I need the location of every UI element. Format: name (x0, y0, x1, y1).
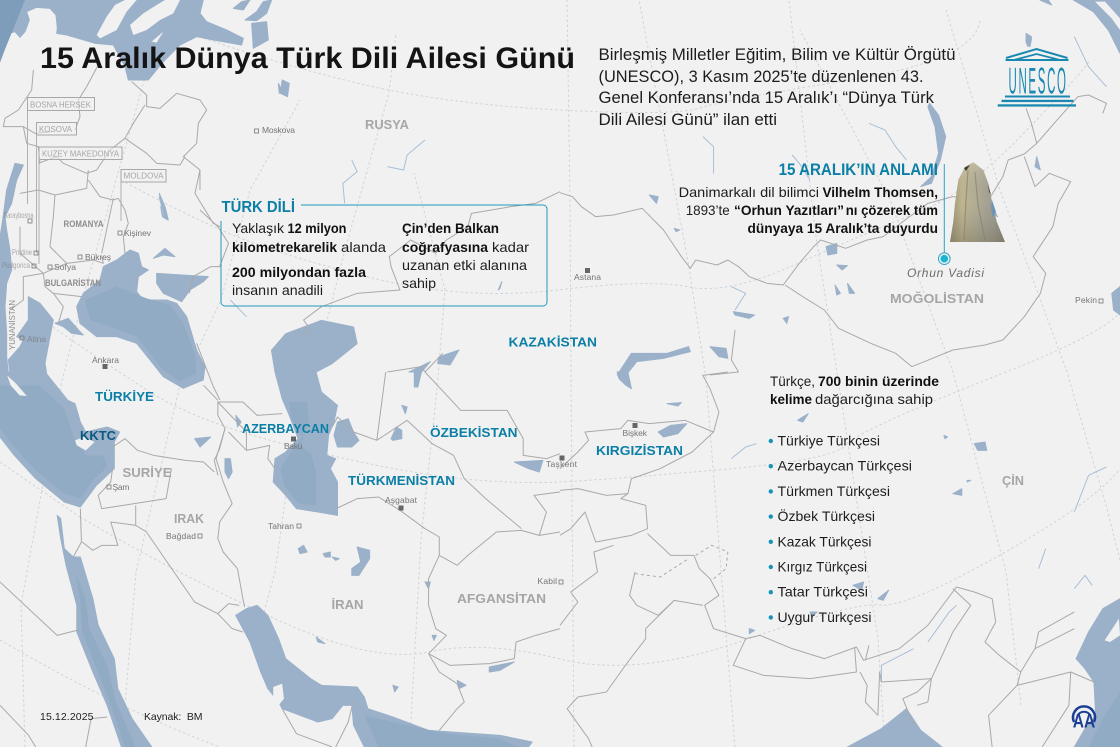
intro paragraph: Genel Konferansı’nda 15 Aralık’ı “Dünya Türk (598, 88, 934, 107)
intro paragraph: Birleşmiş Milletler Eğitim, Bilim ve Kültür Örgütü (598, 45, 956, 64)
Turkic country labels: KKTC (80, 428, 117, 443)
Baltic and north seas (0, 0, 282, 93)
left column text: 200 milyondan fazla (232, 264, 366, 280)
city: Priştine: Priştine (12, 247, 32, 257)
list item: Azerbaycan Türkçesi: Azerbaycan Türkçesi (778, 458, 912, 474)
list intro: 700 binin üzerinde (818, 373, 939, 389)
footer: date and source: 15.12.2025 (40, 711, 94, 723)
right column text: sahip (402, 275, 436, 291)
panel: Türk Dili (221, 197, 547, 306)
list intro: kelime (770, 391, 812, 407)
list item: Türkiye Türkçesi: Türkiye Türkçesi (778, 432, 880, 448)
icon: UNESCO logo: UNESCO (1008, 60, 1066, 102)
tag: Bosna Hersek (28, 98, 94, 204)
city: Moskova: Moskova (262, 125, 295, 135)
left column text: 12 milyon (288, 220, 346, 236)
neutral country labels: IRAK (174, 511, 205, 526)
Turkic country labels: KIRGIZİSTAN (596, 443, 683, 458)
Turkic country labels: TÜRKMENİSTAN (348, 473, 455, 488)
left column text: kilometrekarelik (232, 239, 337, 255)
Mediterranean, Red Sea, Caspian, Gulf (0, 320, 543, 747)
icon: Anadolu Agency logo (1073, 706, 1096, 732)
leader line and marker (938, 164, 950, 264)
list item: Kırgız Türkçesi: Kırgız Türkçesi (778, 558, 867, 574)
neutral country labels: AFGANSİTAN (457, 591, 546, 606)
city: Aşgabat (385, 495, 418, 510)
neutral country labels: ROMANYA (64, 219, 104, 229)
list intro: dağarcığına sahip (815, 391, 933, 407)
explanation text: dünyaya 15 Aralık’ta duyurdu (748, 220, 938, 236)
left column text: insanın anadili (232, 282, 323, 298)
image: Orhun inscription stone (950, 162, 1005, 242)
neutral country labels: SURİYE (122, 465, 172, 480)
tag: Moldova: MOLDOVA (124, 170, 164, 180)
list intro (770, 373, 939, 407)
explanation text: 1893’te (686, 202, 730, 218)
Adriatic, Aegean, Black Sea (zoomed trace) (0, 163, 208, 388)
city: Bağdad: Bağdad (166, 531, 196, 541)
list item: Uygur Türkçesi: Uygur Türkçesi (778, 609, 872, 625)
city: Pekin: Pekin (1075, 295, 1097, 305)
Sea of Okhotsk corner (1026, 0, 1120, 53)
Turkic country labels: KAZAKİSTAN (508, 334, 597, 350)
city: Podgorica: Podgorica (2, 260, 30, 270)
explanation text: nı çözerek tüm (846, 202, 938, 218)
list item: Kazak Türkçesi: Kazak Türkçesi (778, 533, 872, 549)
city: Atina: Atina (27, 334, 46, 344)
city: Kişinev: Kişinev (124, 228, 152, 238)
list item: Türkmen Türkçesi: Türkmen Türkçesi (778, 483, 890, 499)
city: Bakü (284, 436, 303, 451)
list item: Tatar Türkçesi: Tatar Türkçesi (778, 584, 868, 600)
panel: Turkic languages list (769, 373, 939, 625)
panel frame (221, 205, 547, 306)
city: Ankara: Ankara (92, 355, 119, 365)
explanation text: Danimarkalı dil bilimci (679, 184, 819, 200)
Turkic country labels: TÜRKİYE (95, 389, 154, 404)
city: Taşkent: Taşkent (546, 459, 578, 469)
left column text: alanda (341, 239, 386, 255)
map: rivers (159, 37, 1106, 682)
neutral country labels: RUSYA (365, 117, 410, 132)
footer: date and source (40, 711, 202, 723)
right column text (402, 220, 529, 291)
intro paragraph (598, 45, 956, 129)
list item: Özbek Türkçesi: Özbek Türkçesi (778, 507, 875, 524)
neutral country labels: MOĞOLİSTAN (890, 291, 984, 306)
tag: Kosova (36, 122, 76, 253)
footer: date and source: Kaynak: BM (144, 711, 202, 723)
neutral country labels: BULGARİSTAN (45, 278, 101, 288)
callout lines: Balkan country tags (28, 98, 166, 264)
right column text: uzanan etki alanına (402, 257, 527, 273)
city: Bişkek: Bişkek (622, 428, 648, 438)
left column text: Yaklaşık (232, 220, 285, 236)
neutral country labels: ÇİN (1002, 473, 1024, 488)
right column text: Çin’den Balkan (402, 220, 499, 236)
tag: Kuzey Makedonya (39, 147, 122, 264)
explanation text (679, 184, 938, 236)
intro paragraph: Dili Ailesi Günü” ilan etti (598, 110, 777, 129)
city: Aşgabat: Aşgabat (385, 495, 418, 505)
left column text (232, 220, 386, 298)
tag: Moldova (121, 170, 166, 221)
tag: Kuzey Makedonya: KUZEY MAKEDONYA (42, 148, 119, 158)
Turkic country labels (80, 334, 683, 488)
city: Bişkek (622, 423, 648, 438)
city: Astana: Astana (574, 272, 601, 282)
neutral country labels (7, 117, 1024, 612)
city: Saraybosna: Saraybosna (4, 210, 34, 220)
explanation text: Vilhelm Thomsen, (822, 184, 938, 200)
explanation text: “Orhun Yazıtları” (734, 202, 844, 218)
city: Kabil: Kabil (538, 576, 557, 586)
lakes in Central Asia and Siberia (617, 33, 1120, 375)
city: Sofya: Sofya (54, 262, 76, 272)
Turkic country labels: ÖZBEKİSTAN (430, 425, 518, 440)
right column text: coğrafyasına (402, 239, 488, 255)
neutral country labels: YUNANİSTAN (7, 300, 17, 350)
right column text: kadar (492, 239, 529, 255)
list intro: Türkçe, (770, 373, 815, 389)
tag: Bosna Hersek: BOSNA HERSEK (30, 100, 91, 110)
city: Bükreş: Bükreş (85, 252, 111, 262)
neutral country labels: İRAN (332, 597, 364, 612)
icon: UNESCO logo (998, 49, 1076, 107)
location label: Orhun Vadisi (907, 266, 984, 280)
city: Şam: Şam (112, 482, 130, 492)
Turkic country labels: AZERBAYCAN (242, 421, 329, 436)
city: Bakü: Bakü (284, 441, 303, 451)
tag: Kosova: KOSOVA (39, 124, 72, 134)
panel heading: TÜRK DİLİ (222, 197, 295, 216)
icon: Anadolu Agency logo: AA (1073, 712, 1096, 732)
city labels (2, 125, 1103, 586)
title: 15 Aralık Dünya Türk Dili Ailesi Günü (40, 42, 575, 75)
city: Tahran: Tahran (268, 521, 294, 531)
panel: 15 Aralık'ın anlamı (679, 161, 1005, 280)
city: Saraybosna (4, 210, 34, 223)
intro paragraph: (UNESCO), 3 Kasım 2025’te düzenlenen 43. (598, 67, 924, 86)
heading: 15 ARALIK’IN ANLAMI (779, 161, 938, 179)
